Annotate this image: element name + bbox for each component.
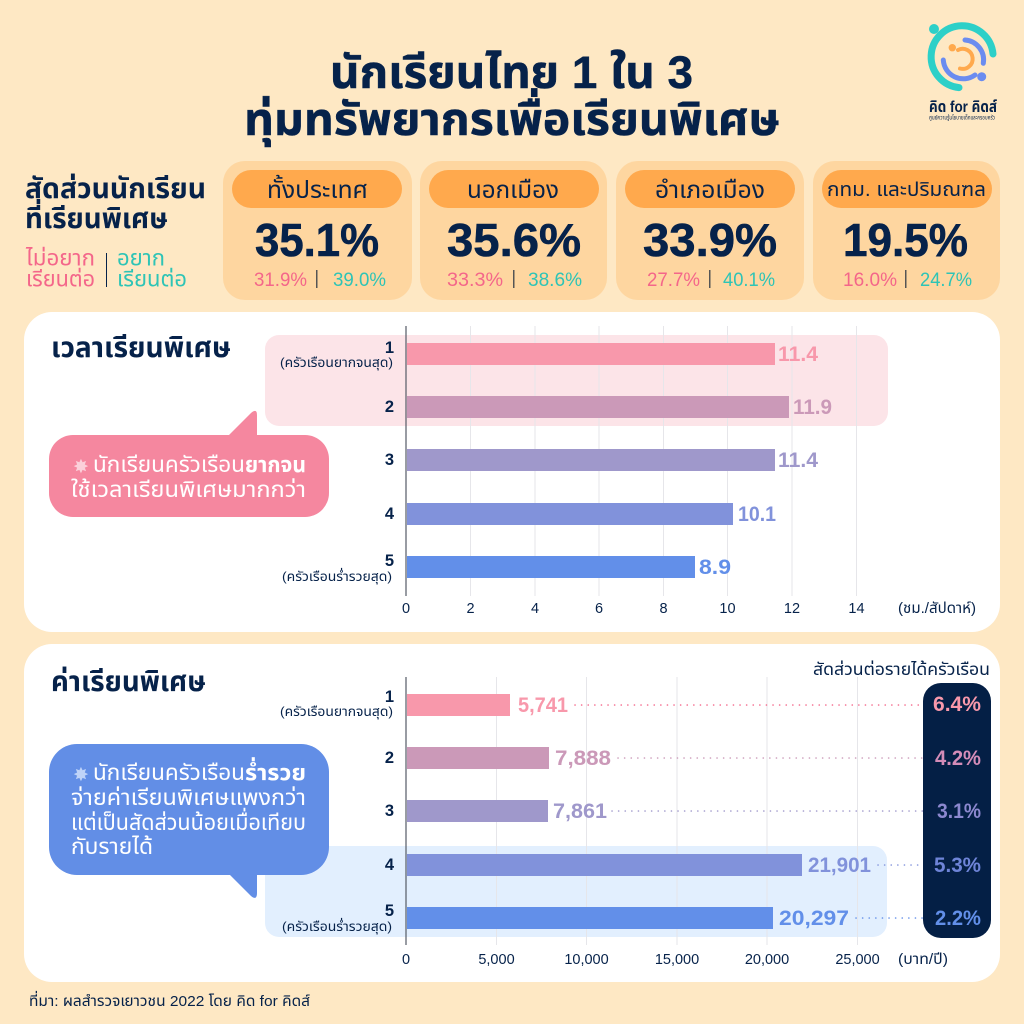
bar chart: baht per year: (บาท/ปี) bbox=[898, 951, 948, 968]
legend: share of students taking tutoring: ที่เรียนพิเศษ bbox=[25, 198, 168, 234]
bar chart: baht per year: 5,000 bbox=[478, 952, 515, 968]
income share column: สัดส่วนต่อรายได้ครัวเรือน bbox=[813, 659, 990, 679]
bar chart: hours per week: (ชม./สัปดาห์) bbox=[898, 600, 976, 617]
bar chart: hours per week: 6 bbox=[595, 601, 603, 617]
legend: share of students taking tutoring: เรียนต่อ bbox=[117, 266, 187, 292]
callout: rich households pay more: แต่เป็นสัดส่วนน้อยเมื่อเทียบ bbox=[71, 807, 306, 835]
bar chart: baht per year bbox=[280, 677, 948, 968]
bar chart: hours per week: 11.4 bbox=[778, 449, 818, 472]
panel: rural: นอกเมือง bbox=[467, 177, 559, 204]
callout: rich households pay more: จ่ายค่าเรียนพิเศษแพงกว่า bbox=[71, 785, 306, 810]
panel: rural: 33.3% bbox=[447, 270, 503, 291]
bar chart: hours per week: 14 bbox=[848, 601, 865, 617]
bar chart: hours per week: 0 bbox=[402, 601, 410, 617]
source note: ที่มา: ผลสำรวจเยาวชน 2022 โดย คิด for คิดส์ bbox=[29, 990, 310, 1010]
legend: share of students taking tutoring: เรียนต่อ bbox=[26, 266, 95, 292]
panel: nationwide: 31.9% bbox=[254, 270, 307, 291]
legend: share of students taking tutoring bbox=[25, 173, 206, 292]
logo: คิด for คิดส์ bbox=[929, 24, 997, 122]
bar chart: baht per year: 25,000 bbox=[835, 952, 880, 968]
bar chart: hours per week: 11.4 bbox=[778, 343, 818, 366]
legend: share of students taking tutoring: อยาก bbox=[117, 246, 165, 270]
bar chart: baht per year: (ครัวเรือนร่ำรวยสุด) bbox=[282, 917, 392, 934]
bar chart: baht per year: 2 bbox=[385, 749, 394, 767]
panel: nationwide: 35.1% bbox=[255, 214, 379, 266]
panel: Bangkok and vicinity: 16.0% bbox=[843, 270, 897, 291]
bar chart: baht per year: 15,000 bbox=[655, 952, 699, 968]
callout: poor households spend more time: นักเรียนครัวเรือน bbox=[93, 452, 245, 477]
title: ทุ่มทรัพยากรเพื่อเรียนพิเศษ bbox=[244, 88, 780, 147]
bar chart: hours per week: 8.9 bbox=[699, 556, 731, 579]
panel: Bangkok and vicinity: 24.7% bbox=[920, 270, 972, 291]
bar chart: baht per year: 21,901 bbox=[808, 854, 871, 877]
bar chart: baht per year: 0 bbox=[402, 952, 410, 968]
callout: poor households spend more time: ยากจน bbox=[245, 452, 306, 477]
panel: Bangkok and vicinity: กทม. และปริมณฑล bbox=[827, 179, 986, 201]
bar chart: hours per week: (ครัวเรือนร่ำรวยสุด) bbox=[282, 567, 392, 584]
bar chart: baht per year: 1 bbox=[385, 688, 394, 706]
panel: urban district: 40.1% bbox=[723, 270, 775, 291]
bar chart: hours per week: 2 bbox=[385, 398, 394, 416]
panel: rural: 38.6% bbox=[528, 270, 582, 291]
bar chart: baht per year: 10,000 bbox=[564, 952, 609, 968]
panel: Bangkok and vicinity bbox=[813, 161, 1000, 300]
bar chart: hours per week: 12 bbox=[784, 601, 800, 617]
logo: คิด for คิดส์: คิด for คิดส์ bbox=[929, 99, 997, 116]
panel: urban district: อำเภอเมือง bbox=[655, 177, 765, 204]
legend: share of students taking tutoring: สัดส่วนนักเรียน bbox=[25, 173, 206, 204]
panel: nationwide bbox=[223, 161, 412, 300]
panel: rural bbox=[420, 161, 607, 300]
income share column: 6.4% bbox=[933, 693, 981, 716]
bar chart: baht per year: (ครัวเรือนยากจนสุด) bbox=[280, 704, 393, 719]
bar chart: hours per week: 3 bbox=[385, 451, 394, 469]
bar chart: baht per year: 5,741 bbox=[518, 694, 568, 717]
panel: urban district bbox=[616, 161, 804, 300]
bar chart: hours per week: 11.9 bbox=[793, 396, 832, 419]
callout: rich households pay more: นักเรียนครัวเรือน bbox=[93, 760, 245, 785]
bar chart: hours per week: 10 bbox=[719, 601, 736, 617]
bar chart: baht per year: 7,861 bbox=[553, 800, 607, 823]
bar chart: baht per year: 5 bbox=[385, 902, 394, 920]
income share column bbox=[813, 659, 991, 938]
callout: poor households spend more time: ใช้เวลาเรียนพิเศษมากกว่า bbox=[71, 477, 306, 502]
dotted connectors bbox=[575, 705, 930, 918]
panel: Bangkok and vicinity: 19.5% bbox=[843, 214, 968, 266]
panel: urban district: 33.9% bbox=[643, 214, 777, 266]
panel: rural: 35.6% bbox=[447, 214, 581, 266]
panel: tutoring cost bbox=[24, 644, 1000, 982]
panel: tutoring time bbox=[24, 312, 1000, 632]
bar chart: baht per year: 3 bbox=[385, 802, 394, 820]
income share column: 5.3% bbox=[934, 854, 981, 877]
bar chart: hours per week: 10.1 bbox=[738, 503, 776, 526]
callout: poor households spend more time: ✸ bbox=[73, 457, 89, 478]
highlight: richest households bbox=[265, 846, 887, 937]
panel: nationwide: 39.0% bbox=[333, 270, 386, 291]
highlight: poorest households bbox=[265, 335, 888, 426]
bar chart: hours per week bbox=[280, 326, 976, 617]
bar chart: hours per week: (ครัวเรือนยากจนสุด) bbox=[280, 355, 393, 370]
logo: คิด for คิดส์: ศูนย์ความรู้นโยบายเด็กและครอบครัว bbox=[929, 114, 995, 122]
bar chart: hours per week: 8 bbox=[659, 601, 668, 617]
title bbox=[244, 47, 780, 147]
bar chart: baht per year: 20,000 bbox=[745, 952, 789, 968]
bar chart: baht per year: 7,888 bbox=[555, 747, 611, 770]
bar chart: hours per week: 2 bbox=[466, 601, 475, 617]
panel: urban district: 27.7% bbox=[647, 270, 700, 291]
bar chart: hours per week: 4 bbox=[385, 505, 395, 523]
panel: nationwide: ทั้งประเทศ bbox=[267, 174, 368, 204]
bar chart: hours per week: 5 bbox=[385, 552, 394, 570]
callout: rich households pay more: ร่ำรวย bbox=[245, 757, 306, 785]
income share column: 4.2% bbox=[935, 747, 981, 770]
heading: tutoring time: เวลาเรียนพิเศษ bbox=[51, 332, 231, 363]
bar chart: baht per year: 20,297 bbox=[779, 907, 849, 930]
legend: share of students taking tutoring: ไม่อยาก bbox=[25, 246, 95, 270]
bar chart: hours per week: 1 bbox=[385, 339, 394, 357]
heading: tutoring cost: ค่าเรียนพิเศษ bbox=[51, 666, 206, 697]
income share column: 3.1% bbox=[937, 800, 981, 823]
income share column: 2.2% bbox=[935, 907, 981, 930]
callout: rich households pay more: กับรายได้ bbox=[71, 834, 153, 859]
callout: rich households pay more: ✸ bbox=[73, 765, 89, 786]
bar chart: baht per year: 4 bbox=[385, 856, 395, 874]
callout: poor households spend more time bbox=[49, 411, 329, 517]
title: นักเรียนไทย 1 ใน 3 bbox=[330, 47, 693, 98]
bar chart: hours per week: 4 bbox=[531, 601, 539, 617]
callout: rich households pay more bbox=[49, 744, 329, 898]
